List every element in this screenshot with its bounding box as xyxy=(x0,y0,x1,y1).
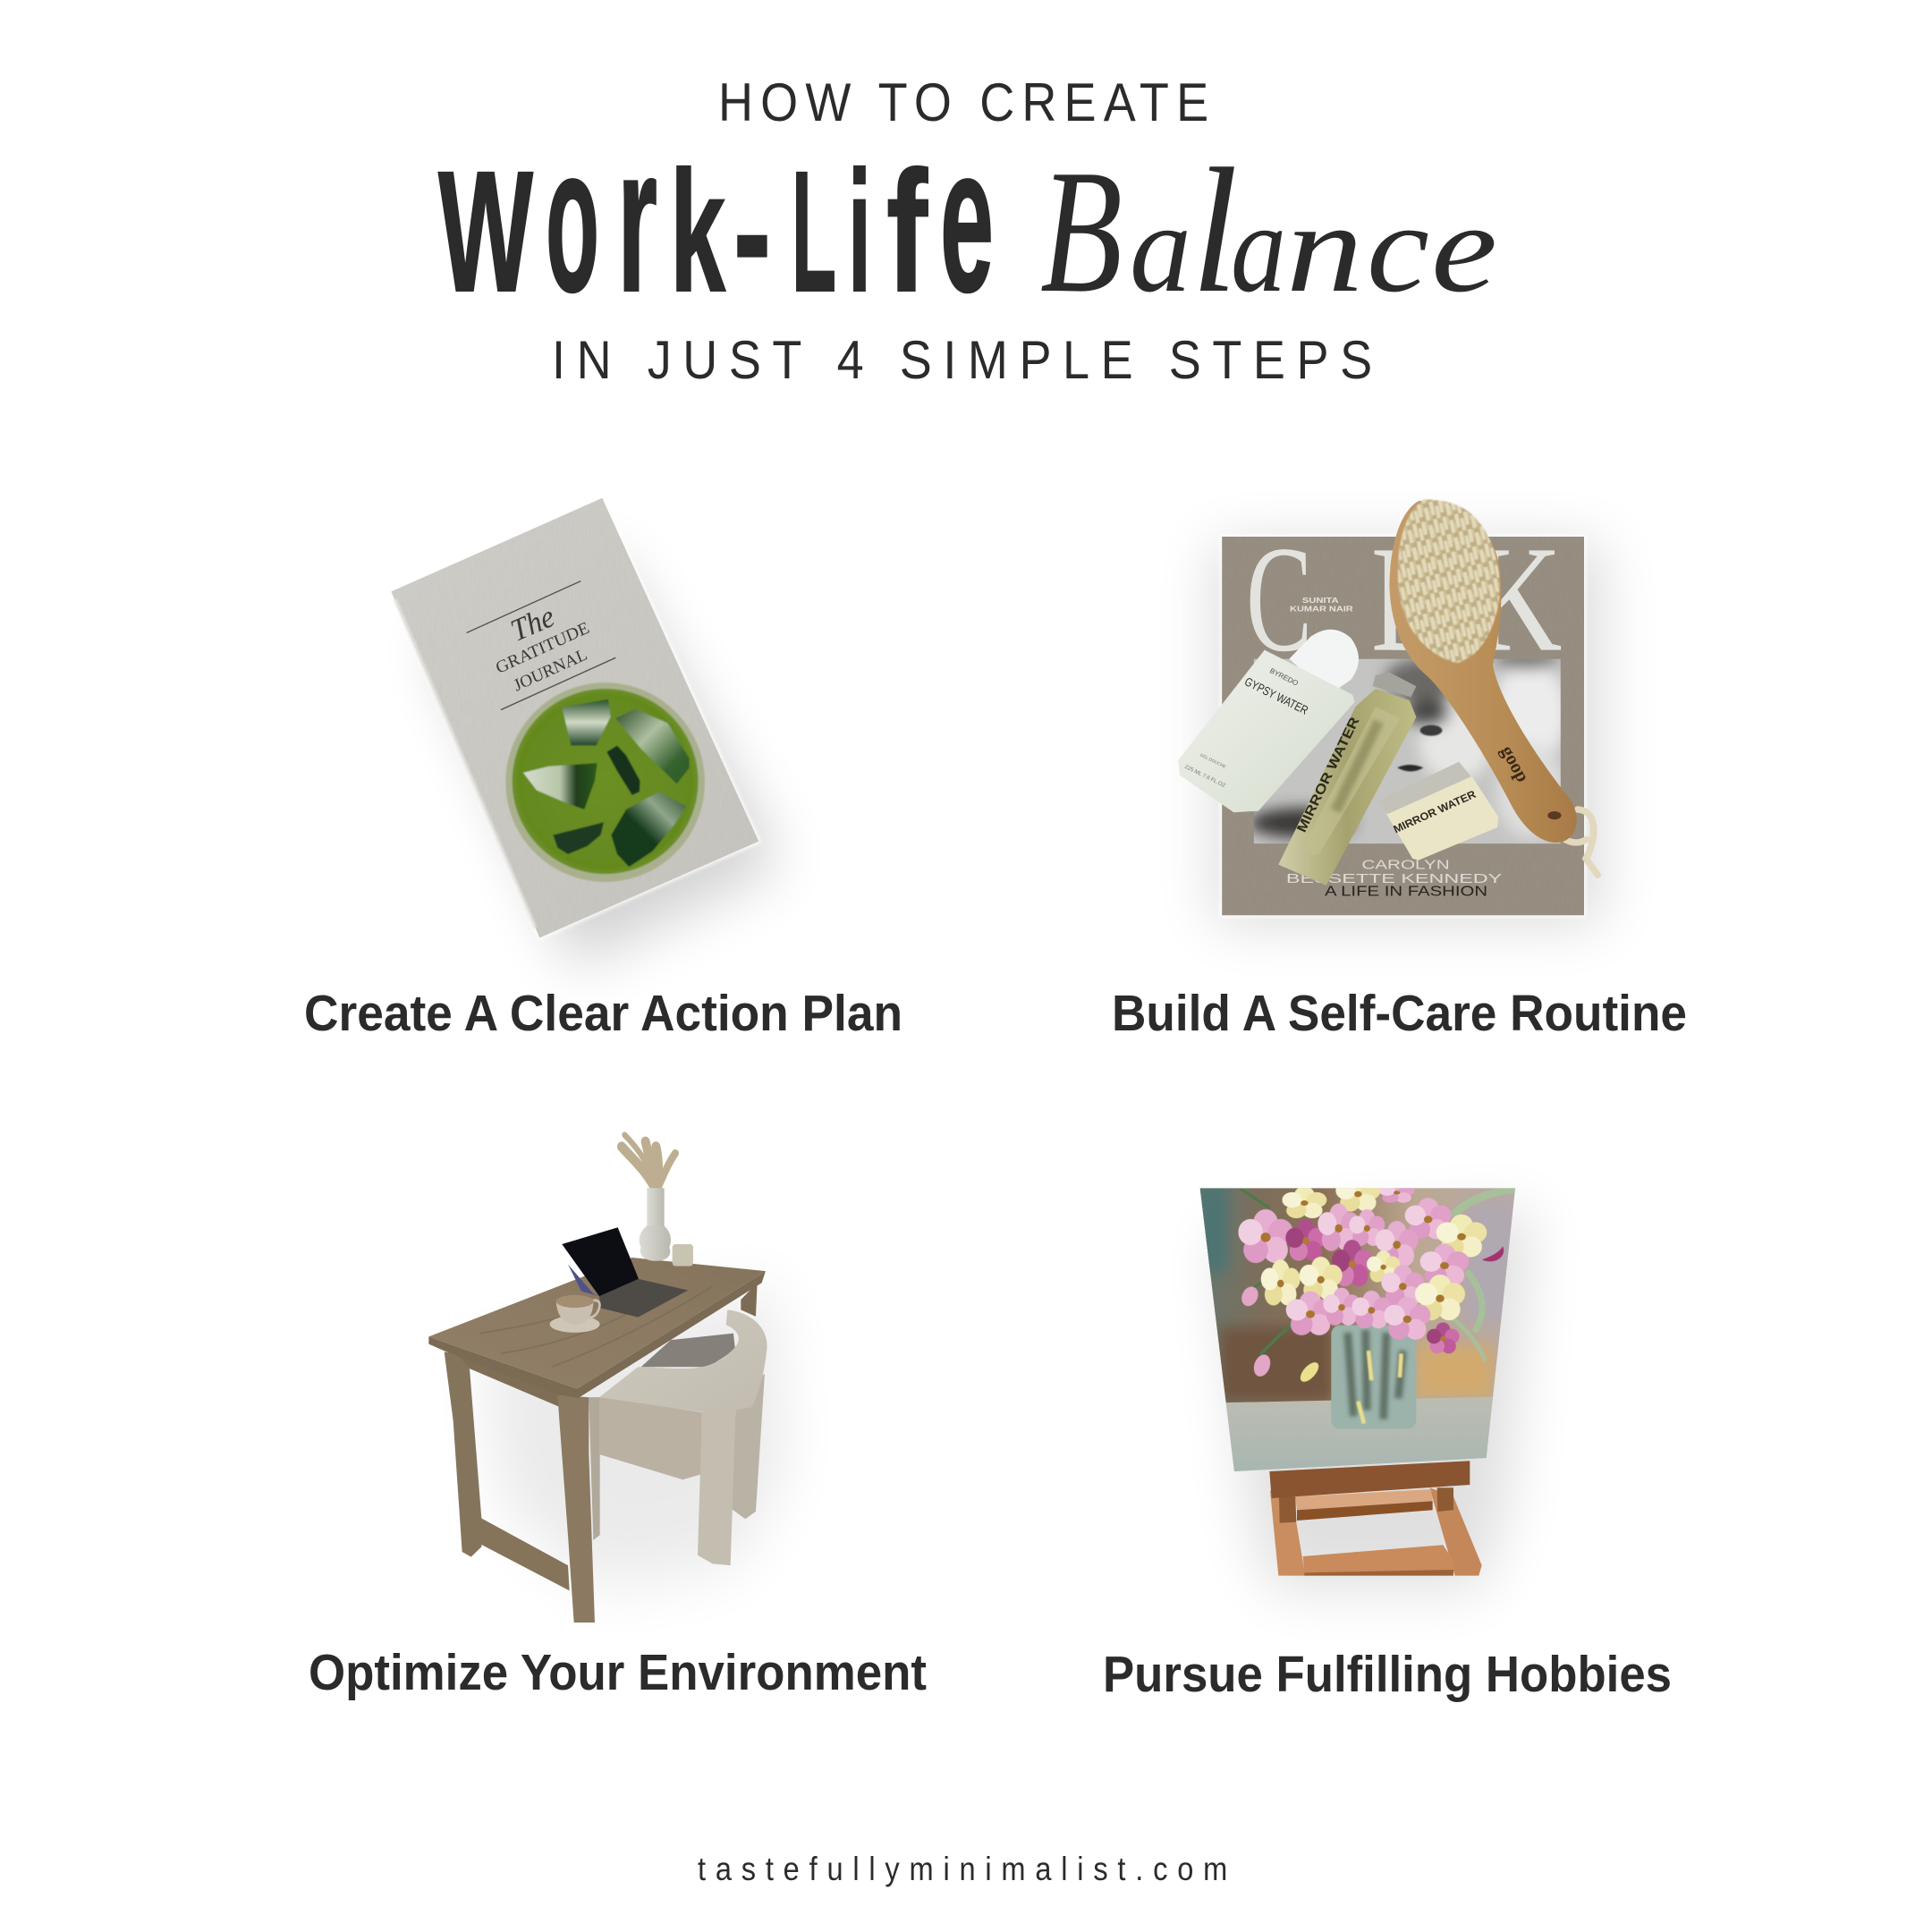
fashion book cover: CAROLYN xyxy=(1361,858,1450,873)
iced matcha glass xyxy=(505,682,705,882)
heading: work-life: f xyxy=(886,135,928,327)
boucle chair xyxy=(589,1309,767,1565)
heading: work-life: W xyxy=(438,135,533,327)
step 2 label: Build A Self-Care Routine xyxy=(1112,985,1687,1042)
wooden dry brush xyxy=(1389,499,1577,843)
fashion book cover: BESSETTE KENNEDY xyxy=(1286,871,1502,886)
step 4 label: Pursue Fulfilling Hobbies xyxy=(1103,1646,1672,1703)
wooden dry brush: goop xyxy=(1496,742,1534,785)
fashion book cover: KUMAR NAIR xyxy=(1290,604,1354,613)
heading line: how to create: HOW TO CREATE xyxy=(718,72,1208,133)
fashion book cover: C xyxy=(1246,515,1312,683)
heading: work-life: - xyxy=(733,135,771,327)
rope loop xyxy=(1548,809,1597,875)
gratitude journal cover: The xyxy=(506,599,559,648)
step 3 photo: desk and chair xyxy=(428,1135,787,1623)
flower bouquet xyxy=(1238,1175,1504,1385)
gypsy water bottle: BYREDO xyxy=(1268,667,1300,688)
step 1 label: Create A Clear Action Plan xyxy=(304,985,902,1042)
heading: work-life: L xyxy=(792,135,836,327)
gypsy water bottle: GEL DOUCHE xyxy=(1199,752,1226,770)
footer website: tastefullyminimalist.com xyxy=(698,1851,1227,1887)
gypsy water bottle: 225 ML 7.6 FL.OZ xyxy=(1183,764,1226,789)
coffee cup and saucer xyxy=(550,1295,600,1333)
heading: work-life: r xyxy=(617,104,657,335)
fashion book cover: K xyxy=(1473,515,1563,683)
heading: balance in script: l xyxy=(1191,132,1238,330)
infographic canvas xyxy=(306,82,1685,1887)
gypsy water bottle xyxy=(1178,630,1359,812)
mirror water cream jar xyxy=(1378,762,1498,860)
step 4 photo: flower painting on easel xyxy=(1192,1175,1532,1589)
heading: work-life: o xyxy=(546,104,599,335)
fashion book cover: B xyxy=(1371,515,1451,683)
wooden easel xyxy=(1269,1461,1482,1576)
heading line: in just 4 simple steps: IN JUST 4 SIMPLE STEPS xyxy=(552,330,1372,391)
gratitude journal cover: JOURNAL xyxy=(511,645,590,696)
leaves and stems xyxy=(1241,1190,1512,1360)
mirror water cream jar: MIRROR WATER xyxy=(1392,788,1478,835)
laptop xyxy=(562,1227,688,1318)
fashion book cover: SUNITA xyxy=(1302,596,1339,605)
heading: work-life: i xyxy=(848,135,871,327)
heading: balance in script: c xyxy=(1367,177,1429,318)
step 3 label: Optimize Your Environment xyxy=(309,1644,927,1701)
heading: balance in script: a xyxy=(1231,177,1286,318)
pampas and vase xyxy=(622,1135,693,1266)
gypsy water bottle: GYPSY WATER xyxy=(1242,674,1310,717)
gratitude journal cover: GRATITUDE xyxy=(493,618,592,678)
glass vase xyxy=(1331,1326,1416,1429)
heading: balance in script: a xyxy=(1130,177,1191,318)
painted canvas xyxy=(1192,1175,1521,1473)
step 2 photo: book with self-care products xyxy=(1178,499,1601,924)
step 1 photo: journal and matcha xyxy=(391,498,781,966)
heading: work-life: k xyxy=(670,135,725,327)
heading: balance in script: B xyxy=(1040,133,1123,329)
wooden desk xyxy=(428,1258,766,1623)
fashion book cover xyxy=(1222,515,1584,915)
title block xyxy=(438,72,1497,391)
mirror water oil bottle: MIRROR WATER xyxy=(1294,715,1363,835)
title block: e xyxy=(940,104,994,335)
mirror water oil bottle xyxy=(1278,673,1416,886)
gratitude journal cover xyxy=(391,498,758,938)
fashion book cover: A LIFE IN FASHION xyxy=(1325,885,1487,899)
heading: balance in script: e xyxy=(1431,177,1497,318)
heading: balance in script: n xyxy=(1286,177,1363,318)
